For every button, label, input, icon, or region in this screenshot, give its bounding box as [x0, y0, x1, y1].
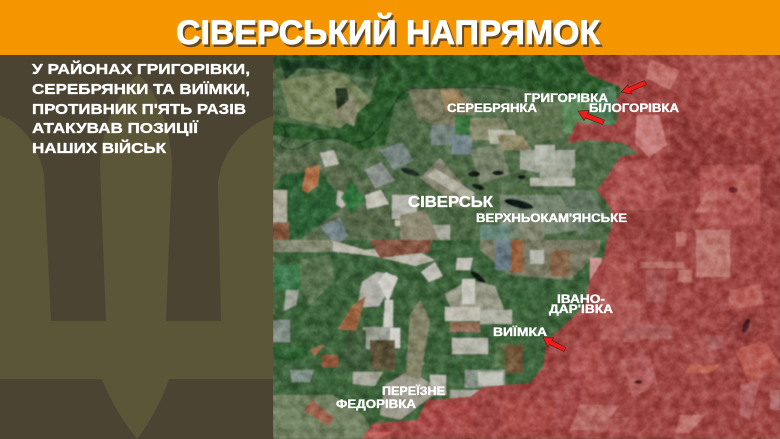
map labels [336, 91, 679, 411]
summary text block: ПРОТИВНИК П'ЯТЬ РАЗІВ [32, 101, 246, 118]
satellite map [273, 55, 780, 439]
map: ground texture [273, 55, 780, 439]
summary text block: У РАЙОНАХ ГРИГОРІВКИ, [32, 60, 250, 78]
map labels: ВЕРХНЬОКАМ'ЯНСЬКЕ [476, 211, 627, 225]
map: green pocket at Hryhorivka [590, 86, 617, 125]
map: occupied territory in red [360, 55, 780, 439]
arrow: Bilohorivka [578, 110, 604, 124]
title banner [0, 0, 780, 55]
summary text block [32, 60, 250, 157]
arrow: Viimka [543, 337, 566, 352]
title text: СІВЕРСЬКИЙ НАПРЯМОК [176, 13, 600, 52]
map labels: ГРИГОРІВКА [524, 91, 608, 105]
map labels: ПЕРЕЇЗНЕ [382, 383, 445, 398]
map labels: БІЛОГОРІВКА [589, 101, 679, 115]
map labels: СЕРЕБРЯНКА [447, 101, 537, 115]
summary text block: НАШИХ ВІЙСЬК [32, 139, 167, 157]
map: green territory [273, 55, 780, 439]
summary text block: СЕРЕБРЯНКИ ТА ВИЇМКИ, [32, 81, 250, 98]
map labels: ДАР'ІВКА [549, 302, 613, 316]
trident emblem [0, 74, 273, 439]
map labels: ВИЇМКА [493, 324, 547, 339]
arrow: Hryhorivka [621, 80, 646, 94]
left panel background [0, 55, 273, 439]
summary text block: АТАКУВАВ ПОЗИЦІЇ [32, 120, 199, 137]
map labels: ФЕДОРІВКА [336, 397, 416, 411]
map labels: ІВАНО- [557, 292, 605, 306]
map labels: СІВЕРСЬК [408, 194, 493, 211]
